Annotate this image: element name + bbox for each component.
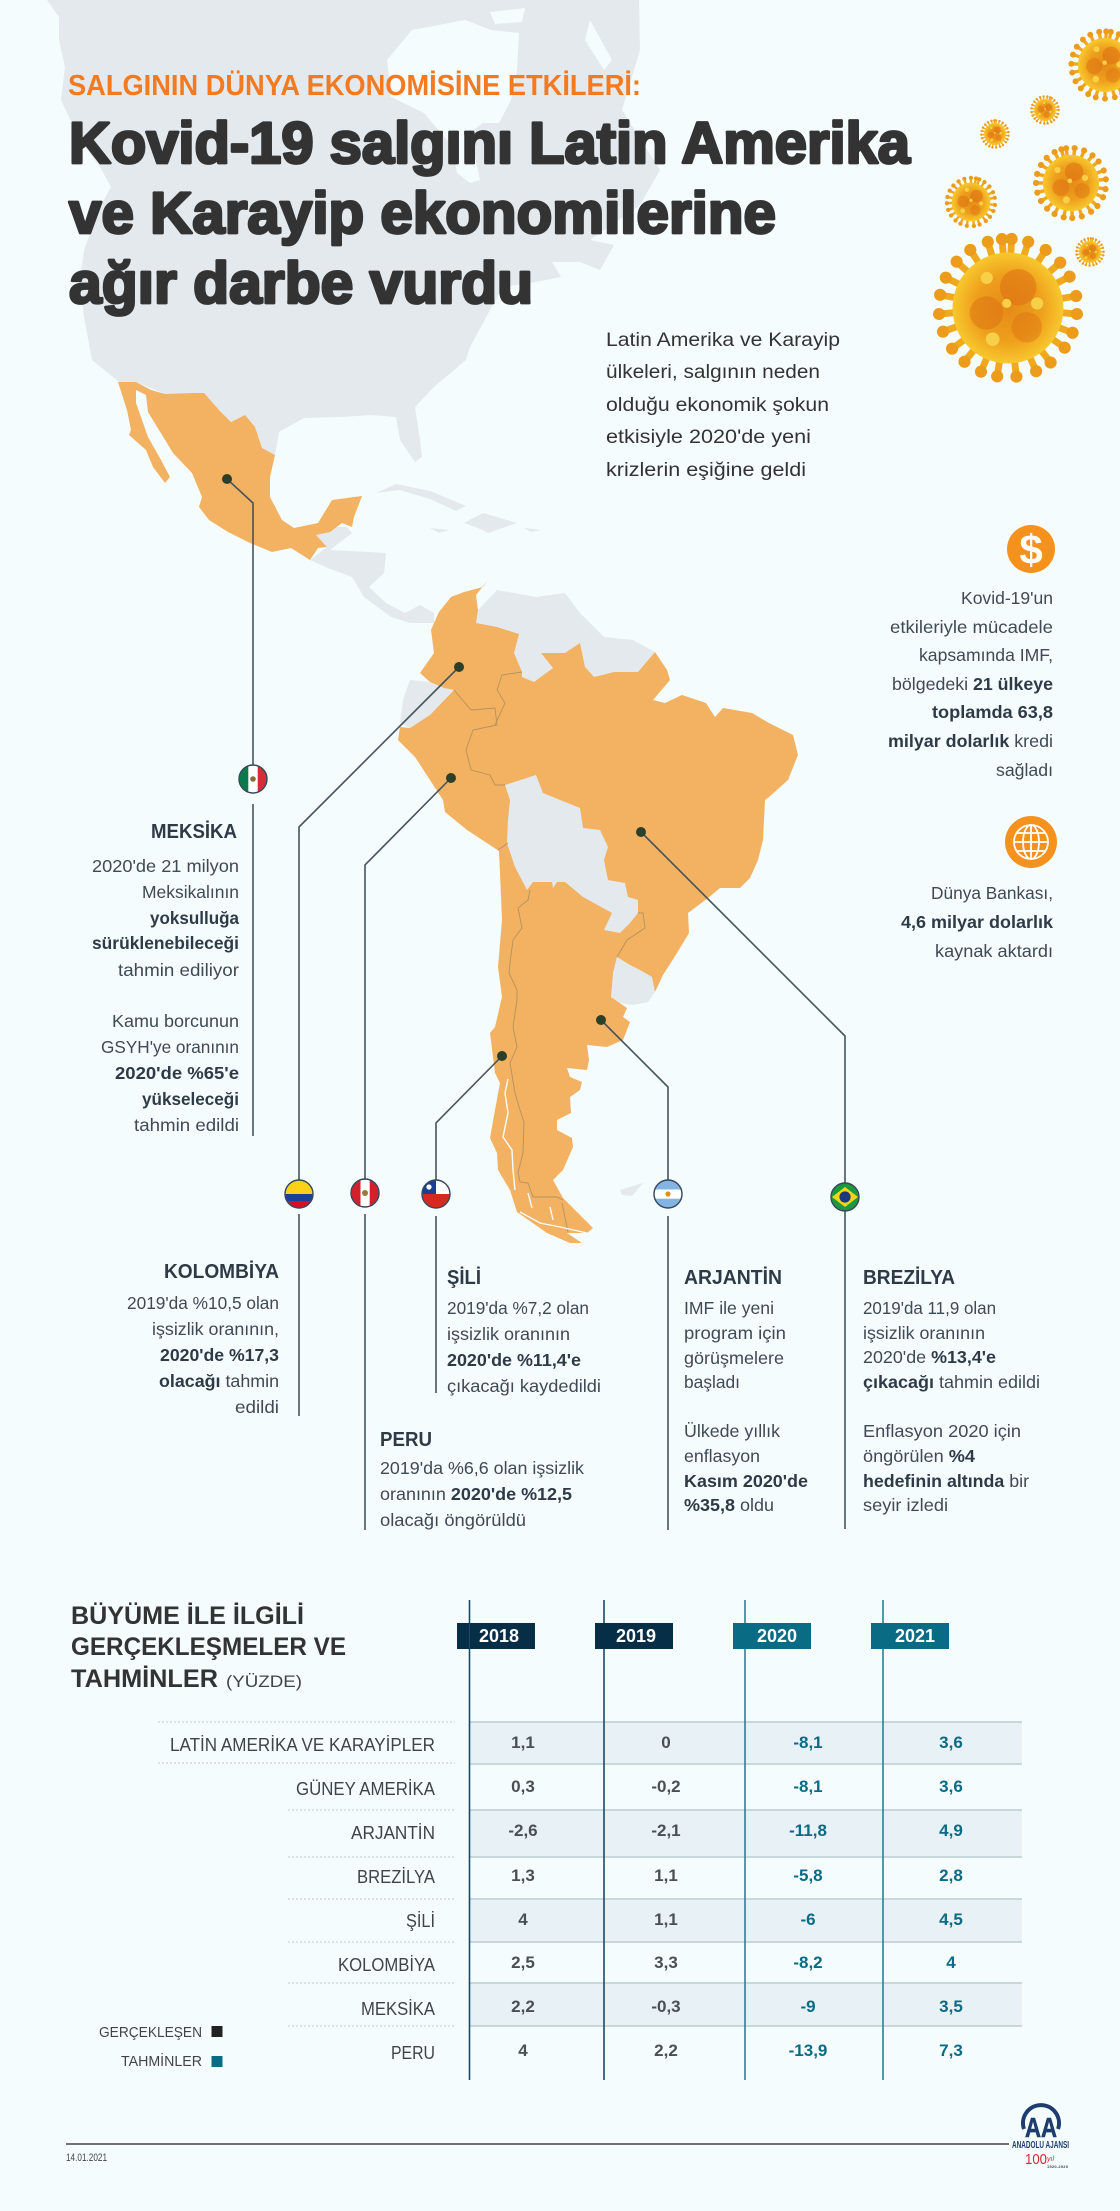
intro text: krizlerin eşiğine geldi (606, 459, 806, 481)
date: 14.01.2021 (66, 2152, 107, 2164)
background map: Venezuela, Guianas, Ecuador, Uruguay, Falklands (400, 590, 655, 1196)
country text: Colombia (127, 1260, 279, 1417)
row: Chile: ŞİLİ (406, 1911, 435, 1931)
country text: Peru: oranının 2020'de %12,5 (380, 1484, 572, 1504)
country text: Mexico: 2020'de 21 milyon (92, 856, 239, 876)
country text: Peru: 2019'da %6,6 olan işsizlik (380, 1458, 584, 1478)
year column lines (470, 1600, 883, 2080)
row: Latin America and Caribbean: LATİN AMERİKA VE KARAYİPLER (170, 1735, 435, 1755)
headline (69, 111, 911, 316)
row: Brazil: 1,1 (654, 1866, 678, 1885)
country text: Argentina: ARJANTİN (684, 1266, 782, 1289)
background map: North and Central America, Caribbean (47, 0, 660, 623)
map: Patagonian channels (503, 1079, 587, 1233)
map: country borders (454, 672, 645, 1232)
row: Latin America and Caribbean: -8,1 (793, 1733, 823, 1752)
flag: Peru (351, 1179, 380, 1207)
year tag: 2018: 2018 (479, 1626, 519, 1646)
country text: Argentina: görüşmelere (684, 1348, 784, 1368)
footer rule (66, 2143, 1009, 2145)
kicker: SALGININ DÜNYA EKONOMİSİNE ETKİLERİ: (68, 69, 641, 102)
country text: Mexico: yoksulluğa (150, 908, 239, 928)
country text: Argentina: IMF ile yeni (684, 1298, 774, 1318)
row: Colombia: 3,3 (654, 1953, 678, 1972)
World Bank text (901, 883, 1053, 961)
row: Chile: 1,1 (654, 1910, 678, 1929)
logo: Anadolu Ajansi: 100 (1025, 2151, 1047, 2168)
row: Argentina: -11,8 (789, 1821, 827, 1840)
table heading: TAHMİNLER (71, 1665, 218, 1693)
year tag: 2019 (595, 1623, 673, 1649)
intro text: etkisiyle 2020'de yeni (606, 426, 811, 448)
row: Argentina: -2,1 (651, 1821, 681, 1840)
flag: Argentina (654, 1180, 682, 1209)
intro text (606, 329, 840, 481)
row: Brazil: BREZİLYA (357, 1867, 435, 1887)
country text: Chile (447, 1266, 601, 1396)
row: Brazil (357, 1866, 963, 1887)
country text: Brazil: BREZİLYA (863, 1266, 955, 1289)
row: South America: 0,3 (511, 1777, 535, 1796)
year tag: 2019: 2019 (616, 1626, 656, 1646)
year tag: 2021: 2021 (895, 1626, 935, 1646)
country text: Colombia: 2020'de %17,3 (160, 1345, 279, 1365)
country text: Brazil: işsizlik oranının (863, 1323, 985, 1343)
logo: Anadolu Ajansi: 1920-2020 (1047, 2164, 1069, 2169)
flag: Mexico (239, 765, 268, 793)
row: Argentina: -2,6 (508, 1821, 538, 1840)
row: Brazil: 2,8 (939, 1866, 963, 1885)
row: Peru: PERU (391, 2043, 435, 2063)
country text: Peru (380, 1429, 584, 1530)
icon: dollar: $ (1019, 526, 1043, 573)
row: Colombia (338, 1953, 956, 1975)
row label dotted rules (158, 1722, 455, 2026)
row: Brazil: -5,8 (793, 1866, 823, 1885)
country text: Mexico: 2020'de %65'e (115, 1063, 239, 1083)
country text: Peru: PERU (380, 1429, 432, 1451)
logo: Anadolu Ajansi: ANADOLU AJANSI (1012, 2139, 1069, 2151)
country text: Chile: ŞİLİ (447, 1266, 481, 1289)
row: Peru: 2,2 (654, 2041, 678, 2060)
intro text: Latin Amerika ve Karayip (606, 329, 840, 351)
row: Chile: 4 (518, 1910, 528, 1929)
row: South America: 3,6 (939, 1777, 963, 1796)
IMF text: milyar dolarlık kredi (888, 731, 1053, 751)
flag: Chile (422, 1180, 450, 1208)
row: Peru: 4 (518, 2041, 528, 2060)
country text: Brazil (863, 1266, 1040, 1515)
row: Peru: 7,3 (939, 2041, 963, 2060)
icon: globe (1005, 816, 1057, 868)
country text: Brazil: çıkacağı tahmin edildi (863, 1372, 1040, 1392)
World Bank text: Dünya Bankası, (931, 883, 1053, 903)
country text: Colombia: edildi (235, 1397, 279, 1417)
headline: ağır darbe vurdu (69, 251, 533, 316)
country text: Chile: işsizlik oranının (447, 1324, 570, 1344)
country text: Chile: 2019'da %7,2 olan (447, 1298, 589, 1318)
row: Argentina: ARJANTİN (351, 1823, 435, 1843)
country text: Colombia: 2019'da %10,5 olan (127, 1293, 279, 1313)
icon: dollar (1007, 525, 1055, 573)
headline: ve Karayip ekonomilerine (69, 181, 776, 246)
map: South American countries (398, 580, 798, 1243)
row: South America: -0,2 (651, 1777, 681, 1796)
row: Colombia: 4 (946, 1953, 956, 1972)
table heading (71, 1601, 346, 1693)
row: Colombia: -8,2 (793, 1953, 823, 1972)
World Bank text: 4,6 milyar dolarlık (901, 912, 1053, 932)
row: Chile (406, 1910, 963, 1931)
row: Colombia: 2,5 (511, 1953, 535, 1972)
IMF text: bölgedeki 21 ülkeye (892, 674, 1053, 694)
country text: Brazil: hedefinin altında bir (863, 1471, 1029, 1491)
year tag: 2021 (871, 1623, 949, 1649)
country text: Colombia: olacağı tahmin (159, 1371, 279, 1391)
IMF text: sağladı (996, 760, 1053, 780)
country text: Chile: çıkacağı kaydedildi (447, 1376, 601, 1396)
logo: Anadolu Ajansi: AA (1025, 2112, 1057, 2143)
country text: Argentina: program için (684, 1323, 786, 1343)
country text: Colombia: KOLOMBİYA (164, 1260, 279, 1283)
logo: Anadolu Ajansi (1012, 2105, 1069, 2169)
country text: Argentina: enflasyon (684, 1446, 760, 1466)
country text: Argentina (684, 1266, 808, 1515)
row: Mexico: -0,3 (651, 1997, 681, 2016)
row: Mexico: 3,5 (939, 1997, 963, 2016)
country text: Argentina: başladı (684, 1372, 740, 1392)
row: Peru: -13,9 (789, 2041, 827, 2060)
row: Chile: 4,5 (939, 1910, 963, 1929)
IMF text: kapsamında IMF, (919, 645, 1053, 665)
year tag: 2020: 2020 (757, 1626, 797, 1646)
title block (68, 69, 911, 316)
country text: Mexico: Meksikalının (142, 882, 239, 902)
IMF text: toplamda 63,8 (932, 702, 1053, 722)
table heading: (YÜZDE) (226, 1672, 302, 1691)
country text: Brazil: seyir izledi (863, 1495, 948, 1515)
country text: Mexico: MEKSİKA (151, 820, 237, 843)
leader lines (227, 479, 845, 1530)
row: South America: GÜNEY AMERİKA (296, 1779, 435, 1799)
data table (158, 1600, 1022, 2080)
virus illustrations (929, 23, 1120, 387)
flag: Brazil (831, 1183, 859, 1211)
row: Latin America and Caribbean (170, 1733, 963, 1755)
country text: Mexico: GSYH'ye oranının (101, 1037, 239, 1057)
table row bands (469, 1722, 1022, 2026)
row: Latin America and Caribbean: 0 (661, 1733, 671, 1752)
year tag: 2018 (457, 1623, 535, 1649)
country text: Brazil: Enflasyon 2020 için (863, 1421, 1021, 1441)
IMF text (888, 588, 1053, 780)
country text: Colombia: işsizlik oranının, (152, 1319, 279, 1339)
row: Latin America and Caribbean: 1,1 (511, 1733, 535, 1752)
country text: Brazil: 2020'de %13,4'e (863, 1347, 996, 1367)
row: South America: -8,1 (793, 1777, 823, 1796)
country text: Brazil: 2019'da 11,9 olan (863, 1298, 996, 1318)
table row rules (469, 1722, 1022, 2026)
row: Argentina: 4,9 (939, 1821, 963, 1840)
row: Mexico: MEKSİKA (361, 1999, 435, 2019)
table heading: GERÇEKLEŞMELER VE (71, 1633, 346, 1661)
IMF text: etkileriyle mücadele (890, 617, 1053, 637)
row: Mexico: -9 (800, 1997, 816, 2016)
table heading: BÜYÜME İLE İLGİLİ (71, 1601, 304, 1630)
country text: Chile: 2020'de %11,4'e (447, 1350, 581, 1370)
year tag: 2020 (733, 1623, 811, 1649)
country text: Peru: olacağı öngörüldü (380, 1510, 526, 1530)
headline: Kovid-19 salgını Latin Amerika (69, 111, 911, 176)
row: Argentina (351, 1821, 963, 1843)
legend: TAHMİNLER (121, 2052, 202, 2070)
country text: Brazil: öngörülen %4 (863, 1446, 975, 1466)
intro text: olduğu ekonomik şokun (606, 394, 829, 416)
row: Latin America and Caribbean: 3,6 (939, 1733, 963, 1752)
row: Mexico: 2,2 (511, 1997, 535, 2016)
row: Chile: -6 (800, 1910, 816, 1929)
country text: Mexico: yükseleceği (142, 1089, 239, 1109)
country text: Argentina: Kasım 2020'de (684, 1471, 808, 1491)
country text: Argentina: %35,8 oldu (684, 1495, 774, 1515)
map: Bolivia and Paraguay (grey) (505, 775, 638, 933)
legend: GERÇEKLEŞEN (99, 2024, 202, 2041)
row: Brazil: 1,3 (511, 1866, 535, 1885)
country text: Mexico: Kamu borcunun (112, 1011, 239, 1031)
row: Colombia: KOLOMBİYA (338, 1955, 435, 1975)
country text: Argentina: Ülkede yıllık (684, 1421, 780, 1441)
map: Mexico (118, 382, 362, 560)
row: Peru (391, 2041, 963, 2063)
intro text: ülkeleri, salgının neden (606, 361, 820, 383)
legend (99, 2024, 222, 2070)
IMF text: Kovid-19'un (961, 588, 1053, 608)
row: Mexico (361, 1997, 963, 2019)
World Bank text: kaynak aktardı (935, 941, 1053, 961)
country text: Mexico: tahmin edildi (134, 1115, 239, 1135)
map location dots (222, 474, 646, 1061)
country text: Mexico (92, 820, 239, 1135)
flag: Colombia (285, 1180, 313, 1208)
country text: Mexico: tahmin ediliyor (118, 960, 239, 980)
country text: Mexico: sürüklenebileceği (92, 933, 239, 953)
logo: Anadolu Ajansi: yıl (1046, 2156, 1054, 2163)
row: South America (296, 1777, 963, 1799)
